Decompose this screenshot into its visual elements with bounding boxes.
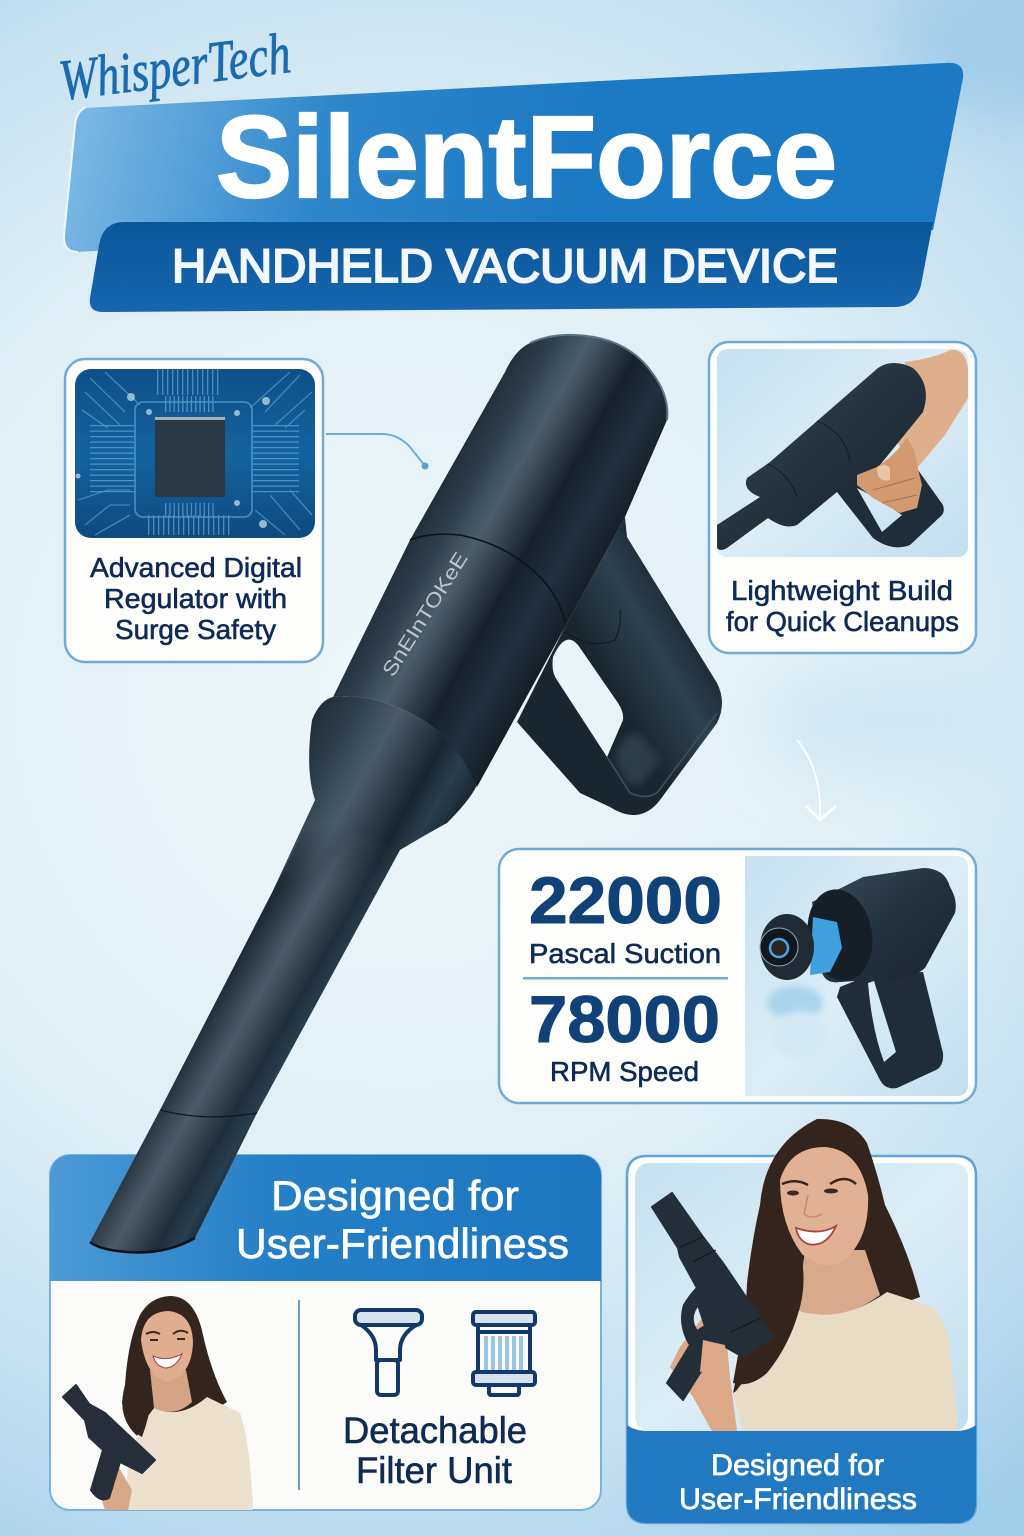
suction device image xyxy=(745,856,968,1096)
arrow: down to specs xyxy=(797,740,836,820)
back hair xyxy=(122,1296,227,1440)
sweater xyxy=(733,1292,958,1431)
device body xyxy=(717,363,926,550)
sweater xyxy=(127,1397,253,1510)
eyebrows and eyes xyxy=(782,1179,856,1185)
face xyxy=(141,1311,193,1382)
divider xyxy=(298,1300,300,1490)
regulator caption xyxy=(90,552,302,645)
woman portrait xyxy=(652,1119,958,1431)
panel: digital regulator xyxy=(65,359,323,662)
tube xyxy=(90,813,400,1252)
caption bar xyxy=(627,1425,976,1523)
banner: light blue title plate xyxy=(64,63,963,252)
blue intake xyxy=(810,917,842,975)
microchip xyxy=(155,418,225,497)
regulator caption: Advanced Digital xyxy=(90,552,302,583)
nose shade xyxy=(804,1195,822,1217)
cylinder xyxy=(333,335,667,787)
spec figures xyxy=(523,863,728,1087)
device rear body xyxy=(812,868,956,982)
regulator caption: Regulator with xyxy=(104,583,287,614)
device logo: SnEInTOKeE xyxy=(379,549,472,681)
caption xyxy=(679,1449,917,1516)
panel heading: Designed for xyxy=(271,1172,519,1219)
panel: woman holding device xyxy=(627,1119,976,1523)
lightweight caption: for Quick Cleanups xyxy=(726,606,959,637)
panel header xyxy=(50,1155,601,1281)
lightweight caption: Lightweight Build xyxy=(731,575,953,606)
hand and wrist xyxy=(102,1468,132,1510)
neck xyxy=(150,1370,192,1412)
callout connector xyxy=(326,434,428,470)
panel heading: User-Friendliness xyxy=(236,1220,569,1267)
smile xyxy=(796,1226,836,1245)
brand logo: WhisperTech xyxy=(56,20,294,113)
small device xyxy=(63,1385,155,1499)
woman with device xyxy=(63,1296,253,1510)
spec figures: 78000 xyxy=(529,982,720,1056)
lightweight caption xyxy=(726,575,959,637)
fingers xyxy=(700,1340,727,1372)
forearm and hand xyxy=(670,1317,737,1431)
panel heading xyxy=(236,1172,569,1267)
banner: dark blue subtitle plate xyxy=(90,222,933,312)
device xyxy=(652,1193,773,1400)
device handle xyxy=(837,470,944,548)
panel: designed for user-friendliness xyxy=(50,1155,601,1510)
circuit board image xyxy=(75,369,315,538)
hair strand xyxy=(122,1400,148,1437)
caption: Designed for xyxy=(711,1449,884,1482)
filter caption xyxy=(343,1410,527,1491)
face xyxy=(780,1147,868,1266)
nozzle xyxy=(760,914,814,980)
filter caption: Filter Unit xyxy=(356,1450,513,1491)
icon: nozzle attachment xyxy=(355,1310,422,1395)
fingers xyxy=(857,438,922,513)
spec figures: Pascal Suction xyxy=(529,938,721,969)
spec figures: RPM Speed xyxy=(550,1056,699,1087)
cone and neck xyxy=(269,696,477,900)
device handle xyxy=(837,972,943,1088)
front hair strand xyxy=(733,1195,804,1384)
header banner xyxy=(56,20,963,312)
neck xyxy=(797,1250,880,1315)
back hair xyxy=(733,1119,920,1393)
caption: User-Friendliness xyxy=(679,1483,917,1516)
filter caption: Detachable xyxy=(343,1410,527,1451)
air swirl xyxy=(767,986,823,1020)
hand holding device image xyxy=(717,349,968,557)
panel: lightweight build xyxy=(709,342,976,653)
regulator caption: Surge Safety xyxy=(115,614,276,645)
handle xyxy=(517,517,722,815)
title: SilentForce xyxy=(216,92,837,222)
arm xyxy=(895,350,968,468)
icon: filter cartridge xyxy=(473,1312,535,1395)
subtitle: HANDHELD VACUUM DEVICE xyxy=(172,239,838,292)
panel: performance specs xyxy=(499,849,976,1103)
spec figures: 22000 xyxy=(529,863,722,937)
main product: vacuum device xyxy=(90,335,722,1252)
